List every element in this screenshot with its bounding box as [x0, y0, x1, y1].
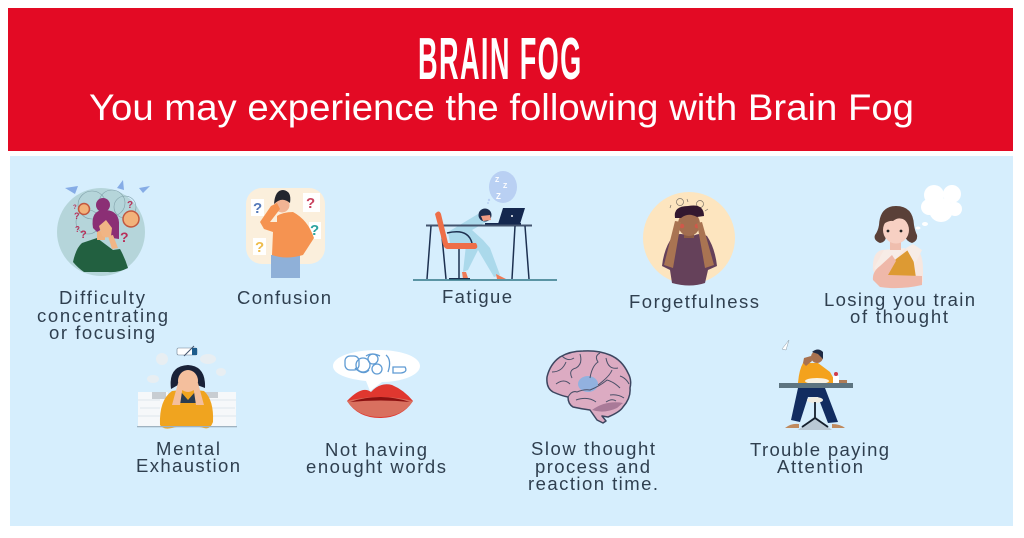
label: fatigue: Fatigue: [442, 286, 512, 307]
label: forgetfulness: Forgetfulness: [629, 291, 759, 312]
icon: woman difficulty concentrating: ?: [120, 229, 129, 245]
icon: fatigue at desk: Z: [503, 183, 508, 190]
label: slow thought process: process and: [535, 456, 650, 477]
header banner: [8, 8, 1013, 151]
label: trouble paying attention: [750, 439, 889, 477]
label: difficulty concentrating: or focusing: [49, 322, 155, 343]
label: losing train of thought: of thought: [850, 306, 948, 327]
label: not having enough words: [306, 439, 446, 477]
label: trouble paying attention: Attention: [777, 456, 863, 477]
icon: confused man: [246, 188, 325, 278]
icon: confused man: ?: [306, 195, 315, 212]
icon: woman difficulty concentrating: ?: [127, 200, 133, 211]
label: mental exhaustion: Mental: [156, 438, 220, 459]
title: BRAIN FOG: [418, 25, 583, 92]
label: mental exhaustion: [136, 438, 240, 476]
subtitle: You may experience the following with Brain Fog: [89, 87, 914, 128]
icon: man at table: [779, 340, 853, 430]
label: slow thought process: Slow thought: [531, 438, 655, 459]
icon: woman difficulty concentrating: ?: [75, 225, 80, 234]
label: slow thought process: [528, 438, 658, 494]
icon: woman difficulty concentrating: ?: [74, 211, 80, 221]
label: losing train of thought: Losing you train: [824, 289, 975, 310]
icon: brain: [547, 351, 631, 423]
icon: woman difficulty concentrating: ?: [73, 205, 77, 211]
icon: forgetful man: [643, 192, 735, 286]
label: trouble paying attention: Trouble paying: [750, 439, 889, 460]
label: mental exhaustion: Exhaustion: [136, 455, 240, 476]
icon: confused man: ?: [310, 222, 319, 239]
icon: fatigue at desk: Z: [495, 177, 500, 184]
label: difficulty concentrating: [37, 287, 168, 343]
label: losing train of thought: [824, 289, 975, 327]
icon: woman difficulty concentrating: [57, 180, 150, 276]
icon: fatigue at desk: [413, 171, 557, 281]
icon: woman thinking with cloud: [873, 185, 962, 288]
label: slow thought process: reaction time.: [528, 473, 658, 494]
icon: exhausted woman: [137, 346, 237, 429]
label: not having enough words: Not having: [325, 439, 427, 460]
icon: confused man: ?: [255, 239, 264, 256]
label: not having enough words: enought words: [306, 456, 446, 477]
label: confusion: Confusion: [237, 287, 331, 308]
icon: woman difficulty concentrating: ?: [80, 229, 87, 241]
icon: confused man: ?: [253, 200, 262, 217]
panel: symptoms background: [10, 156, 1013, 526]
label: difficulty concentrating: Difficulty: [59, 287, 146, 308]
label: difficulty concentrating: concentrating: [37, 305, 168, 326]
icon: fatigue at desk: Z: [496, 192, 501, 201]
icon: lips with speech bubble: [333, 350, 420, 418]
